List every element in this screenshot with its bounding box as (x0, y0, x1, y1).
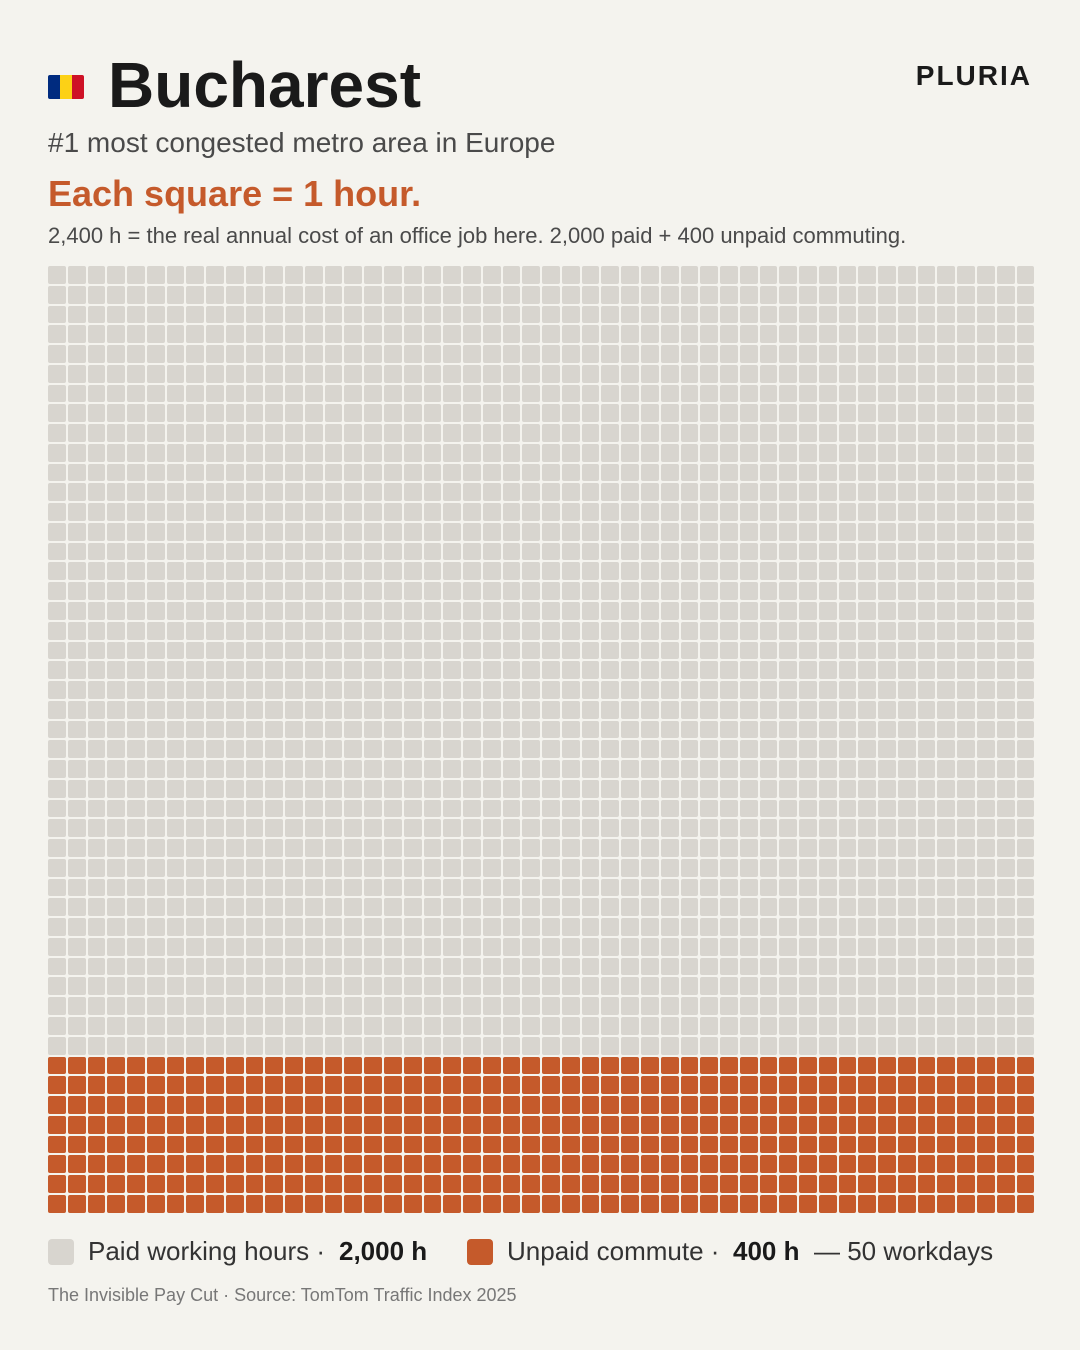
legend label: unpaid: Unpaid commute · (507, 1236, 719, 1266)
brand logo text: PLURIA (916, 60, 1032, 91)
footer source: The Invisible Pay Cut · Source: TomTom Traffic Index 2025 (48, 1285, 517, 1305)
title: Bucharest (108, 49, 421, 121)
unpaid commute squares: 8 rows (48, 1057, 1034, 1213)
legend value: paid: 2,000 h (339, 1236, 427, 1266)
subtitle: #1 most congested metro area in Europe (48, 127, 555, 158)
legend label: paid: Paid working hours · (88, 1236, 325, 1266)
description: 2,400 h = the real annual cost of an office job here. 2,000 paid + 400 unpaid commuting. (48, 223, 906, 248)
paid hours squares: 40 rows (48, 266, 1034, 1055)
legend value: unpaid: 400 h (733, 1236, 800, 1266)
icon: Romanian flag (48, 75, 84, 99)
legend note: workdays: — 50 workdays (814, 1236, 993, 1266)
heading: chart key: Each square = 1 hour. (48, 173, 421, 214)
legend swatch: unpaid (467, 1239, 493, 1265)
legend (48, 1236, 993, 1266)
legend swatch: paid (48, 1239, 74, 1265)
